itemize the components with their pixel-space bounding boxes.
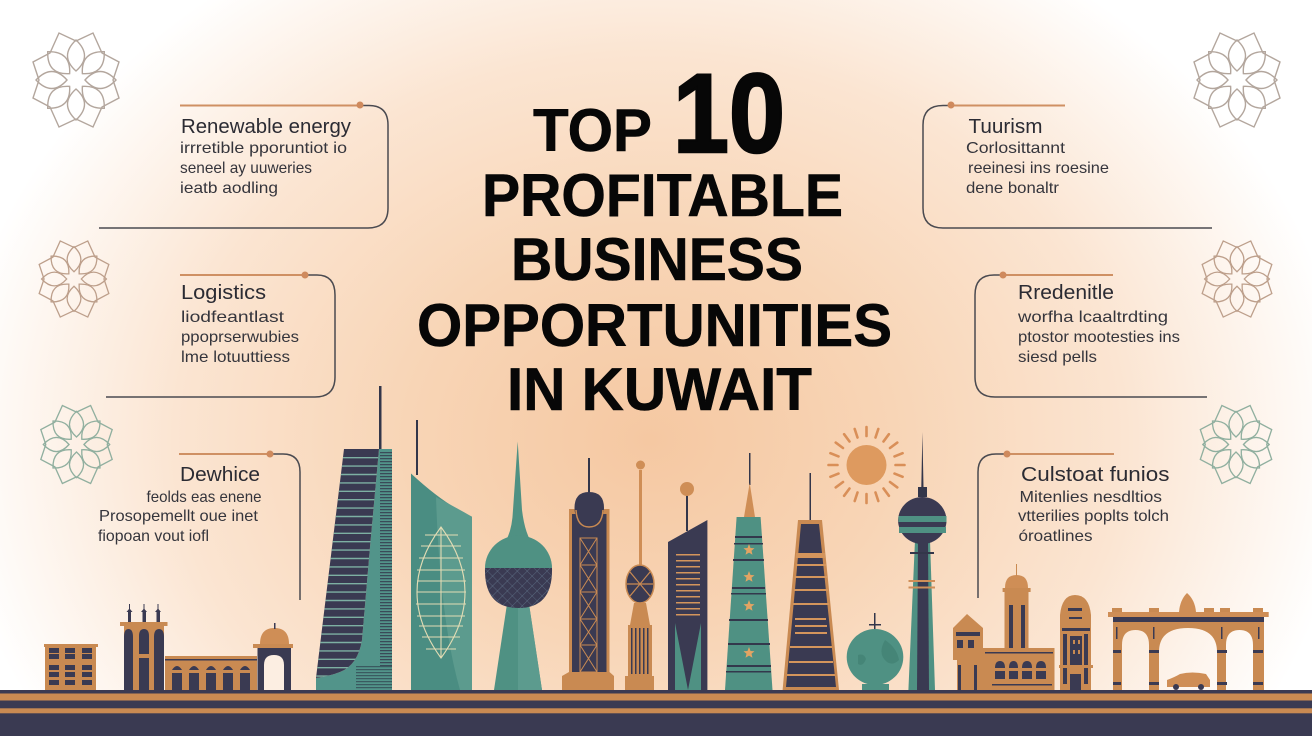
- panel: culstoat funios: vtterilies poplts tolch: [1018, 508, 1169, 525]
- panel: dewhice: Dewhice: [180, 463, 260, 486]
- panel: dewhice: [98, 450, 300, 600]
- panel: tourism: Tuurism: [968, 115, 1042, 138]
- building: arched gate: [1108, 593, 1269, 690]
- panel: logistics: liodfeantlast: [181, 309, 285, 326]
- panel: logistics: ppoprserwubies: [181, 329, 299, 346]
- icon: car: [1167, 672, 1210, 690]
- panel: renewable energy: Renewable energy: [181, 115, 352, 138]
- title: PROFITABLE: [482, 162, 843, 229]
- building: banded tower: [783, 473, 839, 690]
- panel: tourism: [923, 102, 1212, 228]
- panel: renewable energy: ieatb aodling: [180, 180, 278, 197]
- title: OPPORTUNITIES: [417, 292, 892, 359]
- building: tower one: [316, 386, 392, 690]
- title: [417, 51, 892, 423]
- panel: rredenitle: worfha lcaaltrdting: [1017, 309, 1168, 326]
- panel: logistics: Logistics: [181, 281, 266, 304]
- panel: tourism: dene bonaltr: [966, 180, 1060, 197]
- panel: renewable energy: [99, 102, 388, 228]
- building: lattice tower: [562, 458, 614, 690]
- panel: logistics: [106, 272, 335, 397]
- building: Kuwait tower sphere: [485, 442, 552, 690]
- building: orange pole tower: [625, 460, 654, 690]
- panel: dewhice: Prosopemellt oue inet: [99, 508, 259, 525]
- building: star tower: [725, 453, 772, 690]
- panel: culstoat funios: Culstoat funios: [1021, 463, 1170, 486]
- building: navy tower: [668, 482, 707, 690]
- icon: rosette bottom left: [41, 405, 112, 484]
- building: telecom tower: [898, 432, 946, 690]
- panel: dewhice: fiopoan vout iofl: [98, 528, 209, 545]
- panel: culstoat funios: óroatlines: [1018, 528, 1092, 545]
- panel: tourism: Corlosittannt: [966, 140, 1066, 157]
- panel: culstoat funios: [978, 450, 1170, 598]
- title: BUSINESS: [511, 226, 803, 293]
- building: tower two: [411, 420, 472, 690]
- title: IN KUWAIT: [507, 356, 812, 423]
- panel: rredenitle: [975, 272, 1207, 397]
- building: palace: [953, 564, 1093, 690]
- panel: dewhice: feolds eas enene: [146, 489, 262, 506]
- title: 10: [673, 51, 785, 176]
- building: castle and arcade: [120, 604, 257, 690]
- icon: sun: [828, 427, 904, 503]
- title: TOP: [533, 97, 652, 164]
- icon: rosette middle left: [39, 241, 109, 317]
- ground stripes: [0, 690, 1312, 736]
- icon: rosette top left: [33, 33, 119, 127]
- panel: culstoat funios: Mitenlies nesdltios: [1020, 489, 1162, 506]
- panel: logistics: lme lotuuttiess: [181, 349, 290, 366]
- panel: renewable energy: irrretible pporuntiot io: [180, 140, 347, 157]
- building: dome gatehouse: [253, 623, 293, 690]
- icon: rosette middle right: [1202, 241, 1272, 317]
- icon: rosette top right: [1194, 33, 1280, 127]
- panel: renewable energy: seneel ay uuweries: [180, 160, 312, 177]
- building: low block: [44, 644, 98, 690]
- icon: rosette bottom right: [1200, 405, 1272, 484]
- panel: rredenitle: Rredenitle: [1018, 281, 1114, 304]
- panel: tourism: reeinesi ins roesine: [968, 160, 1109, 177]
- panel: rredenitle: ptostor mootesties ins: [1018, 329, 1180, 346]
- panel: rredenitle: siesd pells: [1018, 349, 1097, 366]
- building: teal globe: [847, 613, 903, 690]
